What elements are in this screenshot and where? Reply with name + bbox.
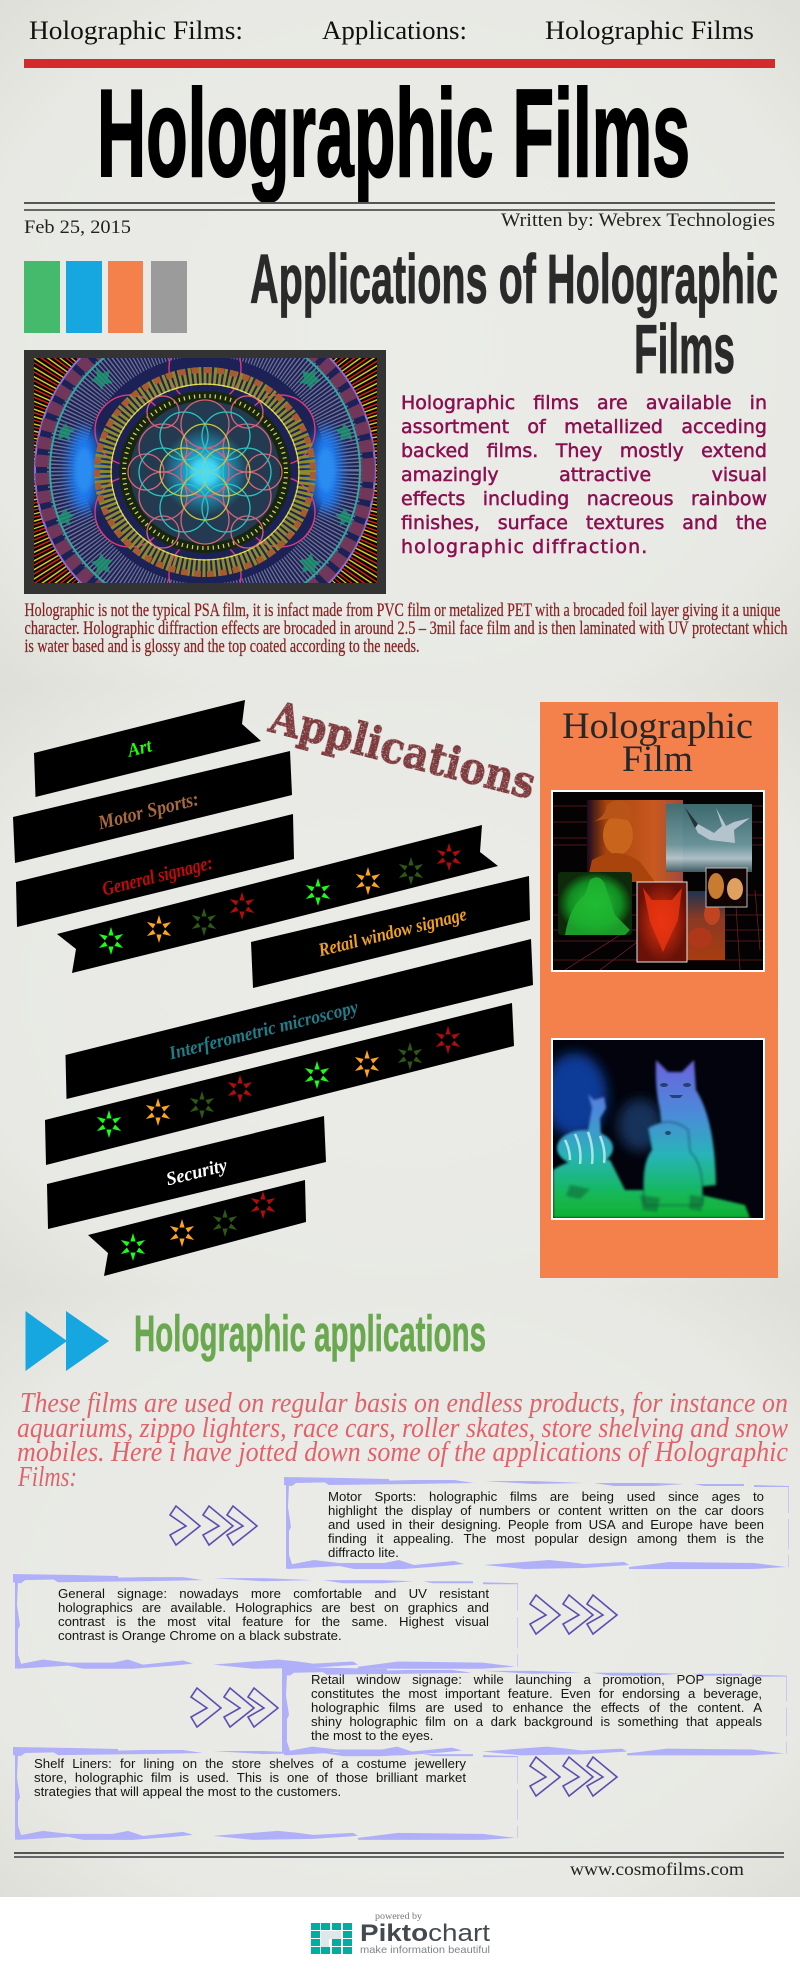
- masthead navigation: [29, 16, 754, 45]
- icon: chevrons for general signage: [530, 1595, 617, 1634]
- icon: double blue arrow: [26, 1311, 109, 1371]
- image: holographic mandala: [24, 350, 386, 594]
- application card: retail window signage: constitutes the most important feature. Even for endorsing a beverage,: [311, 1686, 762, 1701]
- application card: shelf liners: strategies that will appeal the most to the customers.: [34, 1784, 341, 1799]
- application card: general signage: contrast is the most vital feature for the same. Highest visual: [58, 1614, 489, 1629]
- ribbon: art: Art: [125, 735, 155, 762]
- intro paragraph: purple: finishes, surface textures and the: [401, 512, 767, 534]
- ribbon: star row 3: [88, 1180, 306, 1276]
- footer: piktochart credit: powered by: [375, 1911, 423, 1921]
- application card: retail window signage: holographic films are used to enhance the effects of the content. A: [311, 1700, 762, 1715]
- ribbon: motor sports: [13, 751, 292, 863]
- intro paragraph: purple: [401, 390, 767, 562]
- description paragraph: dark red: is water based and is glossy and the top coated according to the needs.: [24, 636, 420, 657]
- intro paragraph: purple: effects including nacreous rainbow: [401, 488, 767, 510]
- paper background: top section: [0, 0, 800, 687]
- date: Feb 25, 2015: [24, 217, 131, 238]
- masthead navigation: Applications:: [322, 16, 467, 45]
- icon: chevrons for retail window signage: [191, 1688, 278, 1727]
- intro paragraph: purple: amazingly attractive visual: [401, 464, 767, 486]
- panel: holographic film: [540, 702, 778, 1278]
- application card: retail window signage: [282, 1667, 787, 1755]
- application card: general signage: holographics are available. Holographics are best on graphics and: [58, 1600, 489, 1615]
- icon: piktochart logo: [311, 1923, 352, 1954]
- paper background: bottom section: [0, 1290, 800, 1897]
- icon: chevrons for shelf liners: [530, 1757, 617, 1796]
- application card: motor sports: finding it appealing. The most popular design among them is the: [328, 1531, 764, 1546]
- ribbon: motor sports: Motor Sports:: [95, 788, 201, 835]
- ribbon: retail window signage: [251, 876, 530, 988]
- ribbon: security: [47, 1116, 326, 1229]
- heading: holographic applications: Holographic applications: [134, 1305, 486, 1362]
- ribbon: retail window signage: Retail window signage: [316, 904, 469, 961]
- application card: motor sports: [284, 1477, 789, 1569]
- ribbon: security: Security: [164, 1155, 230, 1190]
- byline: Written by: Webrex Technologies: [501, 210, 775, 231]
- intro paragraph: script red: [17, 1388, 789, 1493]
- panel heading: [562, 706, 753, 780]
- stamped heading: applications: Applications: [264, 692, 541, 810]
- masthead navigation: Holographic Films: [545, 16, 754, 45]
- application card: motor sports: diffracto lite.: [328, 1545, 399, 1560]
- icon: chevrons for motor sports: [170, 1506, 257, 1545]
- intro paragraph: purple: Holographic films are available in: [401, 392, 767, 414]
- ribbon: star row 2: [45, 1003, 514, 1165]
- intro paragraph: purple: holographic diffraction.: [401, 536, 648, 558]
- panel heading: Film: [622, 739, 693, 780]
- ribbon: general signage: General signage:: [100, 852, 215, 901]
- ribbon: interferometric microscopy: [66, 939, 533, 1099]
- red header bar: [24, 59, 775, 68]
- image: holographic animals: [543, 1038, 765, 1220]
- image: hologram collage: [551, 790, 765, 972]
- masthead navigation: Holographic Films:: [29, 16, 243, 45]
- application card: general signage: contrast is Orange Chrome on a black substrate.: [58, 1628, 342, 1643]
- panel heading: Holographic: [562, 706, 753, 747]
- application card: retail window signage: shiny holographic film on a dark background is something that appeals: [311, 1714, 762, 1729]
- section heading: applications of holographic films: [250, 240, 778, 388]
- application card: shelf liners: store, holographic film is used. This is one of those brilliant market: [34, 1770, 466, 1785]
- website url: www.cosmofilms.com: [570, 1859, 744, 1879]
- ribbon: general signage: [16, 814, 294, 927]
- application card: general signage: [13, 1574, 518, 1669]
- ribbon: interferometric microscopy: Interferometric microscopy: [166, 997, 361, 1065]
- application card: retail window signage: the most to the eyes.: [311, 1728, 433, 1743]
- ribbon: star row 1: [57, 825, 498, 973]
- footer: piktochart credit: Pikto chart: [360, 1920, 490, 1947]
- application card: motor sports: highlight the display of numbers or content written on the car doors: [328, 1503, 764, 1518]
- intro paragraph: purple: backed films. They mostly extend: [401, 440, 767, 462]
- description paragraph: dark red: [24, 600, 788, 657]
- application card: shelf liners: [13, 1747, 518, 1840]
- paper background: middle section: [0, 687, 800, 1290]
- intro paragraph: script red: Films:: [17, 1462, 77, 1493]
- footer: piktochart credit: [0, 1897, 800, 1970]
- footer: piktochart credit: make information beautiful: [360, 1944, 490, 1956]
- colour swatches: [24, 261, 187, 333]
- intro paragraph: purple: assortment of metallized acceding: [401, 416, 767, 438]
- application card: motor sports: and used in their designing. People from USA and Europe have been: [328, 1517, 764, 1532]
- ribbon: art: [34, 700, 261, 797]
